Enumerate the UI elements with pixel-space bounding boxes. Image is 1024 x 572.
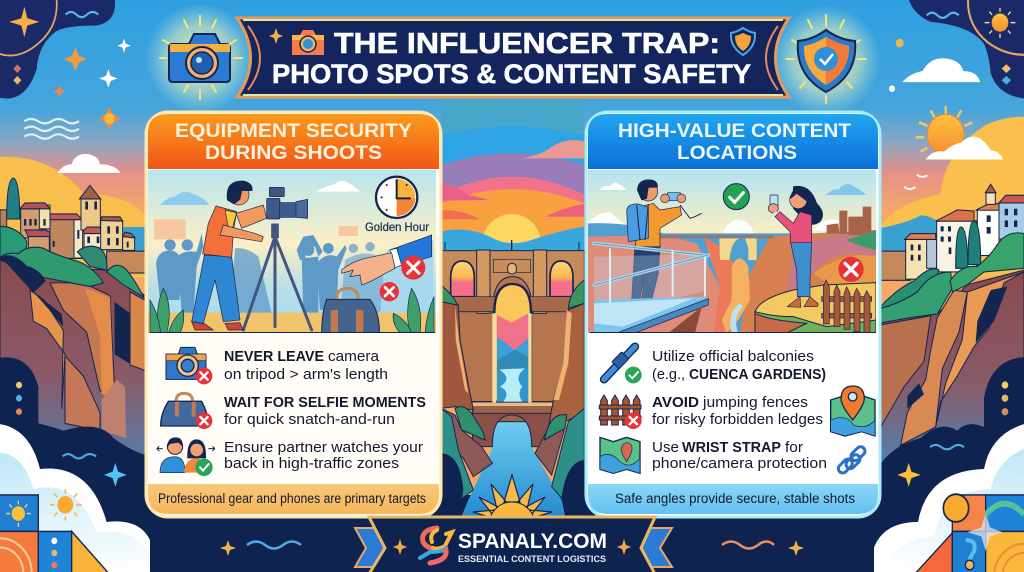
panel: equipment security bbox=[146, 112, 441, 517]
bullet: ensure partner watches bbox=[224, 439, 423, 472]
left bottom sparkle bbox=[220, 540, 236, 556]
crowd silhouettes bbox=[154, 219, 433, 313]
right cliff bbox=[535, 280, 584, 500]
bullet: avoid jumping fences: AVOID bbox=[652, 394, 699, 411]
banner body bbox=[369, 517, 655, 572]
bullet: utilize official balconies bbox=[652, 348, 826, 383]
scene sky bbox=[588, 170, 876, 333]
woman taking photo bbox=[764, 186, 823, 307]
river lower channel bbox=[462, 422, 565, 516]
sparkle right bbox=[617, 539, 631, 555]
navy lower region bbox=[874, 357, 1024, 572]
title glow right bbox=[771, 5, 881, 115]
ground bbox=[148, 313, 436, 333]
navy foreground corners bbox=[442, 454, 584, 500]
icons row 1: camera with x bbox=[166, 347, 212, 384]
small shield icon bbox=[731, 28, 755, 55]
ring sparkle bbox=[9, 7, 39, 37]
distant sun bbox=[723, 220, 753, 250]
small sparkle bbox=[269, 28, 283, 44]
navy top-right blob bbox=[909, 0, 1024, 99]
sky sparkles bbox=[53, 38, 131, 130]
brand name: SPANALY.COM bbox=[458, 530, 607, 553]
lower wave bbox=[930, 445, 964, 449]
decorative dots bbox=[16, 382, 22, 415]
bullet: use wrist strap: phone/camera protection bbox=[652, 455, 827, 472]
title glow left bbox=[145, 3, 255, 113]
icon: fence with x bbox=[599, 395, 642, 429]
small bridge bbox=[660, 235, 773, 260]
camera on tripod bbox=[267, 187, 308, 219]
panel header bbox=[148, 114, 439, 169]
title line 2: PHOTO SPOTS & CONTENT SAFETY bbox=[272, 59, 751, 89]
cloud inner blue bbox=[0, 452, 150, 557]
scene sky bbox=[148, 170, 436, 333]
heading bbox=[175, 120, 412, 164]
icon: map pin bbox=[831, 386, 875, 436]
decorative dots bbox=[1002, 381, 1008, 415]
clouds bbox=[160, 181, 360, 205]
small camera icon bbox=[292, 30, 324, 55]
clouds bbox=[588, 183, 866, 233]
lower wave bbox=[63, 454, 96, 458]
view through main arch bbox=[472, 313, 553, 406]
banner shape bbox=[237, 18, 789, 97]
danger x bbox=[838, 257, 864, 282]
mosaic tiles bbox=[0, 495, 112, 572]
photographer bbox=[192, 181, 267, 330]
sky cloud near sun bbox=[926, 137, 1003, 160]
bridge bbox=[441, 240, 584, 447]
cliff face bbox=[881, 270, 1024, 471]
small diamonds bbox=[13, 64, 21, 85]
birds bbox=[904, 174, 927, 189]
bullet: use wrist strap: WRIST STRAP bbox=[682, 439, 781, 456]
bottom navy band bbox=[150, 495, 874, 572]
left curve bbox=[248, 26, 260, 90]
yellow sun hill bbox=[0, 157, 150, 277]
white cloud bbox=[874, 424, 1024, 572]
tripod bbox=[243, 225, 312, 330]
safe check bbox=[723, 184, 749, 210]
glass balcony bbox=[594, 243, 708, 333]
town windows bbox=[911, 209, 1017, 261]
brand tagline: ESSENTIAL CONTENT LOGISTICS bbox=[458, 554, 606, 565]
ring sun bbox=[985, 8, 1015, 38]
blue horizon bbox=[123, 227, 144, 251]
bullet: utilize official balconies: Utilize official balconies bbox=[652, 348, 814, 365]
top wave bbox=[66, 12, 98, 17]
right bottom wave bbox=[722, 542, 774, 548]
warning badge small bbox=[380, 282, 399, 301]
green bushes bbox=[881, 233, 1024, 323]
mosaic tiles bbox=[912, 494, 1024, 572]
wooden fence bbox=[822, 280, 872, 333]
plants bbox=[150, 288, 434, 333]
bullet: utilize official balconies: (e.g., bbox=[652, 366, 685, 383]
left ribbon bbox=[355, 528, 384, 567]
left bottom wave bbox=[247, 542, 301, 548]
white wave lines bbox=[24, 119, 79, 139]
footer strip bbox=[148, 484, 439, 514]
golden hour label: Golden Hour bbox=[365, 220, 429, 234]
footer note: Safe angles provide secure, stable shots bbox=[615, 491, 855, 506]
small diamonds bbox=[1002, 64, 1011, 85]
banner inner bottom rule bbox=[243, 94, 783, 96]
bullet: never leave camera bbox=[224, 348, 388, 383]
navy lower region bbox=[0, 357, 150, 540]
rays bbox=[160, 16, 242, 99]
bullet: never leave camera: camera bbox=[328, 348, 380, 365]
orange sun on cloud bbox=[50, 489, 82, 520]
heading: LOCATIONS bbox=[677, 142, 797, 164]
icon: chain link bbox=[837, 445, 867, 475]
town windows bbox=[24, 201, 129, 247]
bullet: utilize official balconies: CUENCA GARDENS) bbox=[689, 366, 826, 383]
panel card bbox=[586, 112, 880, 517]
heading: EQUIPMENT SECURITY bbox=[175, 120, 412, 142]
sparkle left bbox=[393, 539, 407, 555]
icon: folded map bbox=[600, 437, 640, 473]
cliff face bbox=[0, 260, 144, 455]
footer strip bbox=[588, 484, 878, 514]
bullet: use wrist strap: for bbox=[785, 439, 803, 456]
right side scene: white town and cliffs bbox=[874, 0, 1024, 572]
bullet: avoid jumping fences bbox=[652, 394, 823, 428]
town buildings bbox=[0, 178, 150, 273]
cliff ledge bbox=[755, 283, 876, 333]
logo mark bbox=[420, 528, 452, 563]
right curve bbox=[766, 26, 778, 90]
yellow sun hill bbox=[881, 117, 1024, 277]
title line 1: THE INFLUENCER TRAP: bbox=[334, 28, 720, 60]
reaching hand bbox=[342, 235, 432, 285]
left cliff bbox=[441, 285, 492, 500]
left side scene: Ronda town and cliffs bbox=[0, 0, 150, 572]
bullet: use wrist strap bbox=[652, 439, 827, 472]
right bottom sparkle bbox=[788, 540, 804, 556]
illustration: photographer being targeted bbox=[148, 170, 436, 333]
footer banner bbox=[355, 517, 672, 572]
blue sparkle bbox=[104, 463, 127, 487]
icons row 2: bag with x bbox=[161, 393, 212, 429]
bullet: use wrist strap: Use bbox=[652, 439, 679, 456]
bullet: ensure partner watches: back in high-traffic zones bbox=[224, 455, 399, 472]
icon: large shield bbox=[786, 15, 866, 103]
upper cloud bbox=[902, 58, 980, 82]
icons row 3: partners with check bbox=[157, 437, 215, 476]
man with backpack bbox=[627, 180, 702, 308]
heading bbox=[618, 120, 851, 164]
panel card bbox=[146, 112, 441, 517]
green bushes bbox=[0, 226, 144, 297]
orange ring bbox=[968, 0, 1024, 55]
camera bag bbox=[322, 288, 379, 333]
panel: high-value content locations bbox=[586, 112, 880, 517]
central scene: Puente Nuevo bridge and sunset bbox=[435, 100, 590, 520]
hills and canyon bbox=[588, 223, 876, 333]
distant castle bbox=[827, 207, 871, 235]
bottom sunrise bbox=[473, 475, 552, 548]
navy top-left blob bbox=[0, 0, 115, 99]
bullet: wait for selfie moments: for quick snatch-and-run bbox=[224, 411, 395, 428]
panel header bbox=[588, 114, 878, 169]
sky dots bbox=[889, 39, 904, 92]
sunset sky bands bbox=[441, 100, 584, 256]
rays bbox=[786, 15, 866, 103]
heading: DURING SHOOTS bbox=[205, 142, 382, 164]
bullet: never leave camera: on tripod > arm's length bbox=[224, 366, 388, 383]
heading: HIGH-VALUE CONTENT bbox=[618, 120, 851, 142]
bullet: avoid jumping fences: jumping fences bbox=[702, 394, 808, 411]
clock: golden hour bbox=[376, 177, 417, 218]
sky cloud bbox=[57, 154, 121, 173]
footer note: Professional gear and phones are primary targets bbox=[158, 491, 426, 506]
yellow sparkle bbox=[897, 463, 921, 487]
warning badge bbox=[401, 256, 425, 280]
large sun with rays bbox=[916, 106, 972, 154]
bullet: wait for selfie moments bbox=[224, 394, 426, 428]
orange ring bbox=[0, 0, 57, 56]
banner inner top rule bbox=[243, 19, 783, 21]
town buildings bbox=[881, 184, 1024, 280]
blue horizon bbox=[881, 215, 939, 252]
icon: strap with check bbox=[604, 347, 642, 383]
white cloud with tiles bbox=[0, 424, 150, 555]
top wave bbox=[927, 13, 959, 18]
cloud inner blue bbox=[884, 449, 1024, 572]
right ribbon bbox=[642, 528, 672, 567]
bullet: ensure partner watches: Ensure partner watches your bbox=[224, 439, 423, 456]
icon: large camera bbox=[160, 16, 242, 99]
bullet: wait for selfie moments: WAIT FOR SELFIE MOMENTS bbox=[224, 394, 426, 411]
title banner bbox=[237, 18, 789, 97]
bullet: avoid jumping fences: for risky forbidden ledges bbox=[652, 411, 823, 428]
bullet: never leave camera: NEVER LEAVE bbox=[224, 348, 324, 365]
illustration: safe balcony vs risky ledge bbox=[588, 170, 876, 333]
